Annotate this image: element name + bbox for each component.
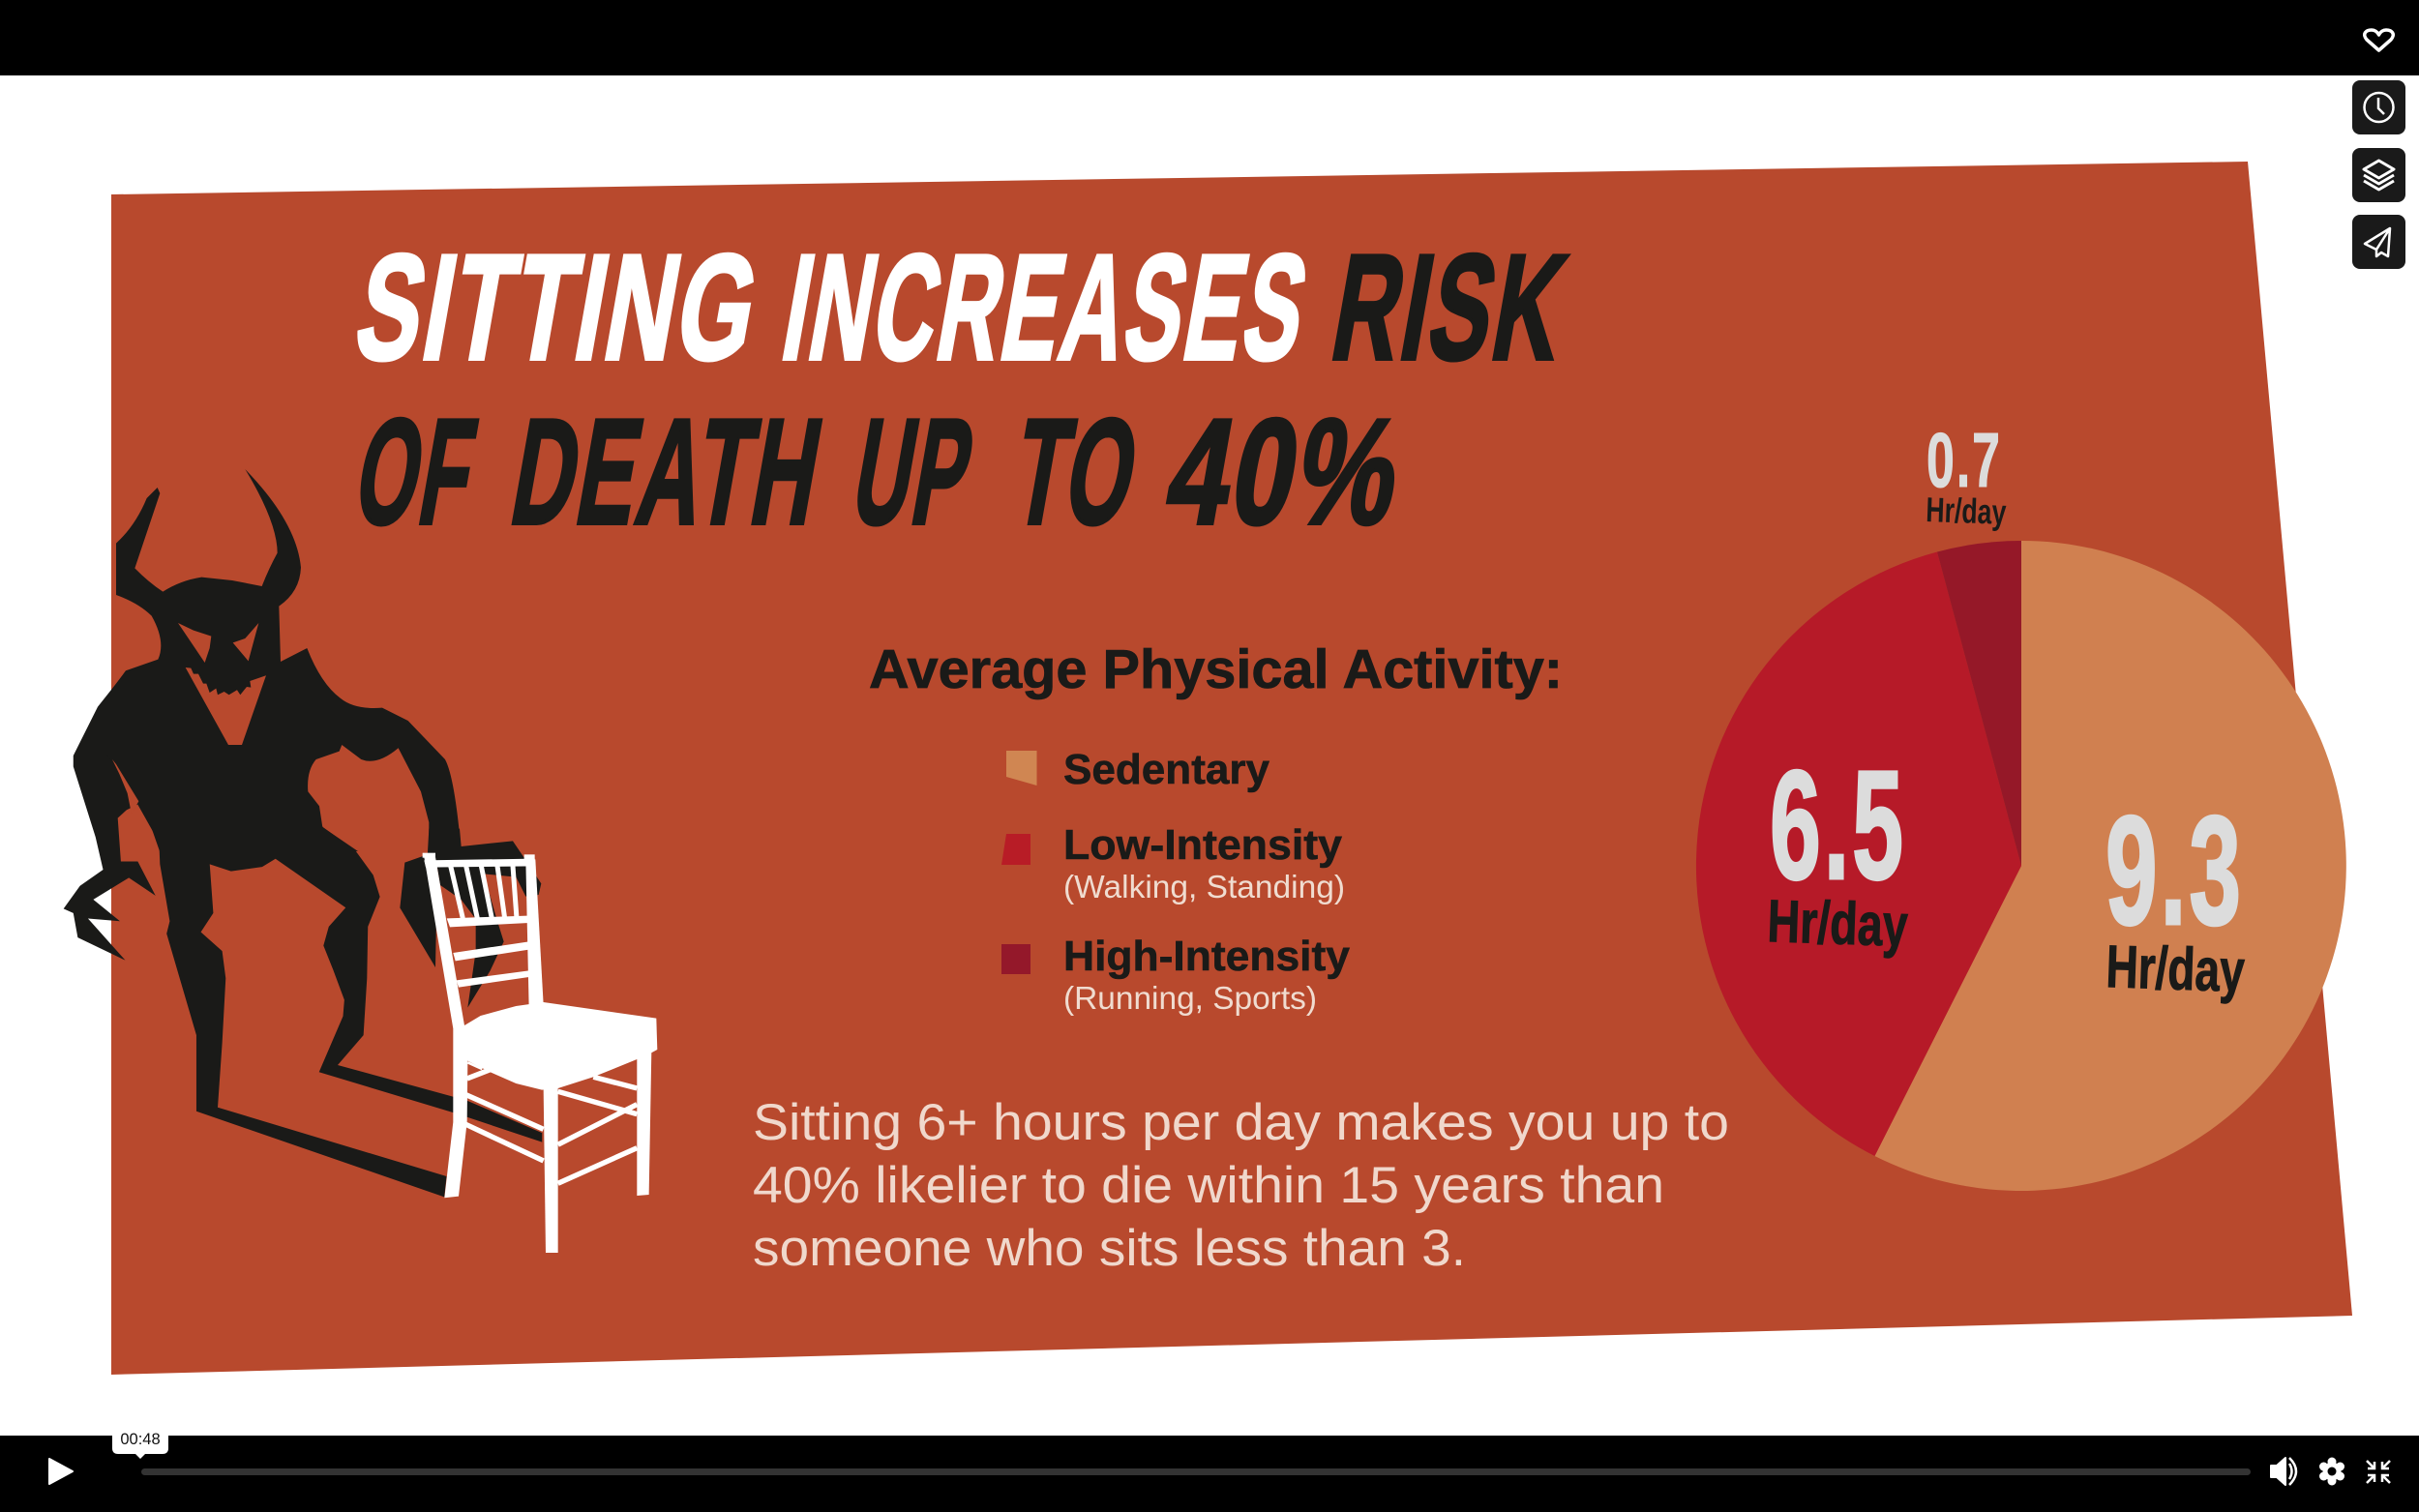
- button: layers: [2352, 148, 2405, 202]
- button: paper plane: [2352, 215, 2405, 269]
- demon mouth and teeth: [186, 667, 266, 745]
- title line 1 white words: [345, 224, 1321, 392]
- swatch: sedentary: [1006, 751, 1037, 786]
- demon legs, left arm and claw: [64, 670, 542, 1197]
- label: high intensity: High-Intensity: [1063, 933, 1351, 980]
- pie label: 0.7: [1926, 417, 2007, 532]
- top black bar: [0, 0, 2419, 75]
- chair left post and rear leg: [424, 857, 467, 1198]
- body text: [753, 1094, 1729, 1277]
- tooltip: time: [112, 1427, 168, 1459]
- chair frame: [423, 853, 657, 1253]
- tooltip: time: 00:48: [120, 1431, 161, 1448]
- swatch: low intensity: [1001, 834, 1030, 865]
- label: low intensity: Low-Intensity: [1063, 821, 1343, 869]
- legend heading: Average Physical Activity:: [869, 638, 1563, 700]
- pie chart: [1696, 541, 2346, 1191]
- button: clock: [2352, 80, 2405, 134]
- chair slats and stretchers: [451, 866, 637, 1183]
- panel: orange slanted background: [111, 162, 2352, 1375]
- pie label: 0.7: Hr/day: [1926, 489, 2007, 532]
- slice: sedentary: [1875, 541, 2346, 1191]
- title line 1 white words: SITTING: [345, 224, 772, 392]
- sublabel: walking, standing: (Walking, Standing): [1063, 869, 1345, 904]
- chair front right leg: [637, 1052, 651, 1196]
- pie label: 6.5: Hr/day: [1767, 888, 1909, 960]
- icon: heart: [2365, 30, 2393, 50]
- title line 2: UP: [843, 389, 986, 556]
- body text line 3: someone who sits less than 3.: [753, 1220, 1466, 1277]
- pie label: 9.3: [2105, 784, 2246, 1005]
- legend: [1001, 746, 1351, 1016]
- bottom control bar: [0, 1436, 2419, 1512]
- title line 1 white words: INCREASES: [772, 224, 1321, 392]
- title word RISK: RISK: [1322, 224, 1579, 392]
- body text line 2: 40% likelier to die within 15 years than: [753, 1157, 1664, 1214]
- icon: collapse fullscreen: [2367, 1461, 2390, 1483]
- title line 2: 40%: [1156, 389, 1416, 556]
- illustration: hand and white chair: [400, 829, 657, 1253]
- title: [345, 224, 1579, 556]
- chair front left leg: [544, 1086, 558, 1253]
- gap between arm and torso: [112, 759, 138, 815]
- chair rails: [447, 916, 529, 927]
- swatch: high intensity: [1001, 944, 1030, 974]
- pie label: 6.5: 6.5: [1770, 738, 1906, 911]
- slice: low intensity: [1696, 551, 2021, 1156]
- body text line 1: Sitting 6+ hours per day makes you up to: [753, 1094, 1729, 1151]
- icon: play: [49, 1459, 73, 1484]
- progress track: [141, 1468, 2251, 1475]
- sublabel: running, sports: (Running, Sports): [1063, 980, 1317, 1016]
- pie label: 9.3: Hr/day: [2105, 934, 2246, 1005]
- icon: volume: [2271, 1458, 2296, 1485]
- title line 2: DEATH: [501, 389, 835, 556]
- title line 2: [345, 389, 1416, 556]
- chair right post: [525, 859, 544, 1008]
- demon left eye: [178, 623, 211, 663]
- demon head, horns, torso and right arm: [106, 469, 462, 851]
- demon right eye: [233, 623, 258, 661]
- icon: settings gear: [2319, 1457, 2344, 1486]
- demon hand behind chair: [400, 829, 541, 1008]
- title line 2: TO: [1003, 389, 1151, 556]
- illustration: demon: [64, 469, 542, 1197]
- demon face details: [112, 623, 266, 815]
- title line 2: OF: [345, 389, 489, 556]
- pie label: 0.7: 0.7: [1926, 417, 2002, 503]
- pie label: 6.5: [1767, 738, 1909, 960]
- slice: high intensity: [1937, 541, 2021, 866]
- chair seat: [455, 1002, 657, 1090]
- chair top rail: [424, 859, 535, 868]
- label: sedentary: Sedentary: [1063, 746, 1270, 793]
- pie label: 9.3: 9.3: [2105, 784, 2244, 957]
- chair finials: [423, 853, 435, 858]
